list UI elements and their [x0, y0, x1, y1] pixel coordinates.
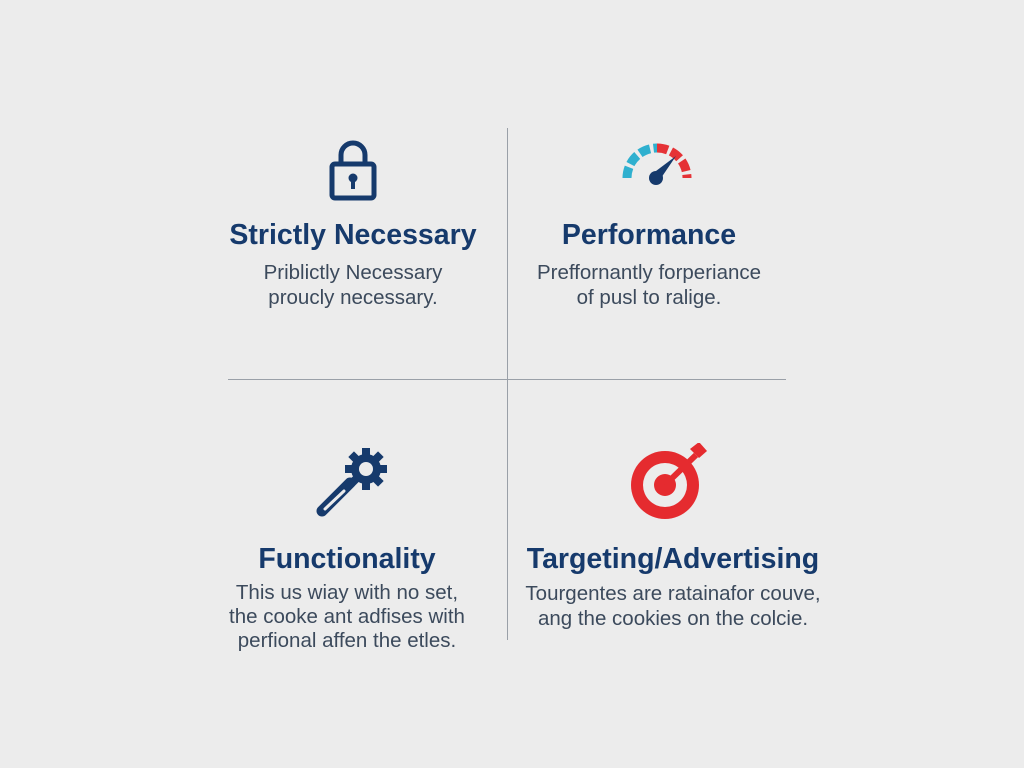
icon: target	[631, 443, 707, 519]
panel: performance	[537, 144, 761, 309]
text: Preffornantly forperiance	[537, 261, 761, 284]
panel: functionality	[229, 448, 465, 652]
text: Priblictly Necessary	[264, 261, 442, 284]
icon: lock	[330, 140, 376, 200]
text: ang the cookies on the colcie.	[538, 607, 808, 630]
text	[525, 582, 821, 630]
icon: gauge	[622, 144, 692, 185]
text: perfional affen the etles.	[238, 629, 456, 652]
text	[537, 261, 761, 309]
text	[264, 261, 442, 309]
heading: Functionality	[258, 543, 436, 575]
text: of pusl to ralige.	[577, 286, 721, 309]
panel: strictly necessary	[229, 140, 477, 309]
heading: Targeting/Advertising	[527, 543, 819, 575]
icon: wrench gear	[316, 448, 387, 516]
text: proucly necessary.	[268, 286, 438, 309]
text: the cooke ant adfises with	[229, 605, 465, 628]
heading: Strictly Necessary	[229, 219, 477, 251]
panel: targeting	[525, 443, 821, 630]
heading: Performance	[562, 219, 736, 251]
text	[229, 581, 465, 652]
text: This us wiay with no set,	[236, 581, 458, 604]
text: Tourgentes are ratainafor couve,	[525, 582, 821, 605]
